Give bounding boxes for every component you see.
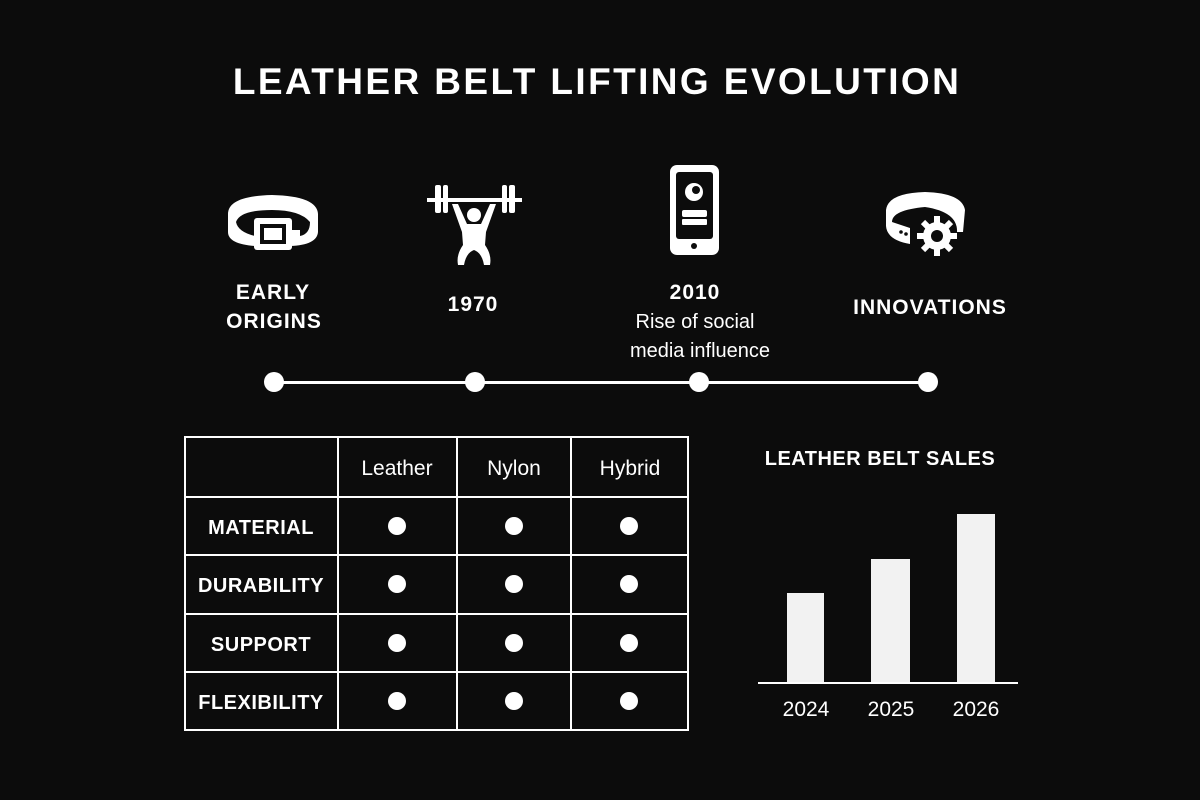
bar chart: leather belt sales: 2024: [783, 698, 830, 721]
icon: belt: [228, 195, 318, 250]
icon: belt with gear: [886, 192, 965, 256]
label: 1970: 1970: [448, 293, 498, 316]
comparison table: [185, 437, 688, 730]
comparison table: SUPPORT: [211, 634, 311, 656]
label: 2010: [630, 281, 770, 362]
label: early origins: ORIGINS: [226, 310, 322, 333]
bar chart: leather belt sales: [758, 448, 1018, 721]
comparison table: FLEXIBILITY: [198, 692, 324, 714]
label: early origins: EARLY: [236, 281, 310, 304]
bar chart: leather belt sales: 2025: [868, 698, 914, 721]
timeline: [264, 372, 938, 392]
bar chart: leather belt sales: LEATHER BELT SALES: [765, 448, 995, 470]
comparison table: Nylon: [487, 457, 541, 480]
title: LEATHER BELT LIFTING EVOLUTION: [233, 61, 961, 102]
label: 2010: Rise of social: [636, 311, 754, 333]
icon: weightlifter: [427, 185, 522, 265]
label: 2010: 2010: [670, 281, 720, 304]
label: 2010: media influence: [630, 340, 770, 362]
comparison table: DURABILITY: [198, 575, 324, 597]
bar chart: leather belt sales: 2026: [953, 698, 999, 721]
comparison table: Hybrid: [600, 457, 660, 480]
label: innovations: INNOVATIONS: [853, 296, 1007, 319]
comparison table: Leather: [361, 457, 433, 480]
comparison table: MATERIAL: [208, 517, 314, 539]
icon: phone: [670, 165, 719, 255]
